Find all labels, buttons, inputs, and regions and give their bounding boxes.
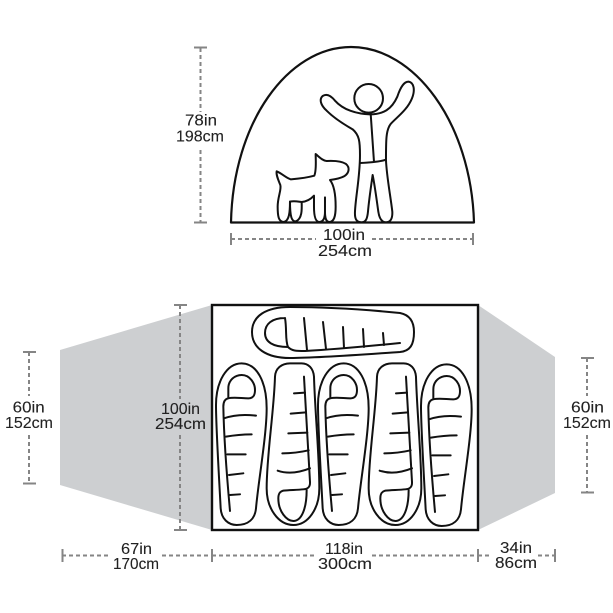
- dimension: left vestibule height 60in: 152cm: [5, 415, 53, 432]
- dimension: floor depth 100in: [155, 305, 206, 530]
- dimension: bottom right 34in: 34in: [500, 540, 532, 557]
- dimension: tent width 100in: [231, 227, 473, 260]
- dimension: right vestibule height 60in: [563, 358, 611, 492]
- dimension: left vestibule height 60in: 60in: [13, 400, 45, 417]
- dimension: bottom center 118in: [212, 541, 478, 573]
- sleeping bag: horizontal top: [252, 307, 414, 358]
- dimension: left vestibule height 60in: [5, 352, 53, 484]
- dimension: tent height 78in: [176, 48, 224, 222]
- dimension: right vestibule height 60in: 60in: [571, 400, 604, 417]
- dimension: right vestibule height 60in: 152cm: [563, 415, 611, 432]
- dimension: bottom right 34in: [478, 540, 555, 572]
- dimension: bottom left 67in: 170cm: [113, 556, 159, 573]
- icon: dog: [277, 154, 349, 222]
- dimension: bottom left 67in: 67in: [121, 541, 152, 558]
- dimension: bottom left 67in: [62, 541, 212, 573]
- dimension: tent width 100in: 254cm: [318, 243, 372, 260]
- dimension: floor depth 100in: 254cm: [155, 416, 206, 433]
- icon: person with raised arms: [321, 82, 414, 222]
- floor plan: right vestibule: [478, 305, 555, 530]
- sleeping bag: second: [267, 363, 319, 525]
- dimension: tent height 78in: 198cm: [176, 129, 224, 146]
- floor plan: tent body: [212, 305, 478, 530]
- sleeping bag: far right: [421, 364, 472, 526]
- sleeping bag: fourth: [369, 363, 421, 525]
- dimension: tent width 100in: 100in: [323, 227, 365, 244]
- dimension: bottom right 34in: 86cm: [495, 555, 537, 572]
- dimension: floor depth 100in: 100in: [161, 401, 200, 418]
- floor plan: left vestibule: [60, 305, 212, 530]
- sleeping bag: far left: [216, 363, 267, 525]
- sleeping bag: center: [318, 363, 369, 525]
- dimension: bottom center 118in: 118in: [325, 541, 363, 558]
- tent side profile: [231, 47, 474, 222]
- dimension: tent height 78in: 78in: [185, 113, 217, 130]
- dimension: bottom center 118in: 300cm: [318, 556, 372, 573]
